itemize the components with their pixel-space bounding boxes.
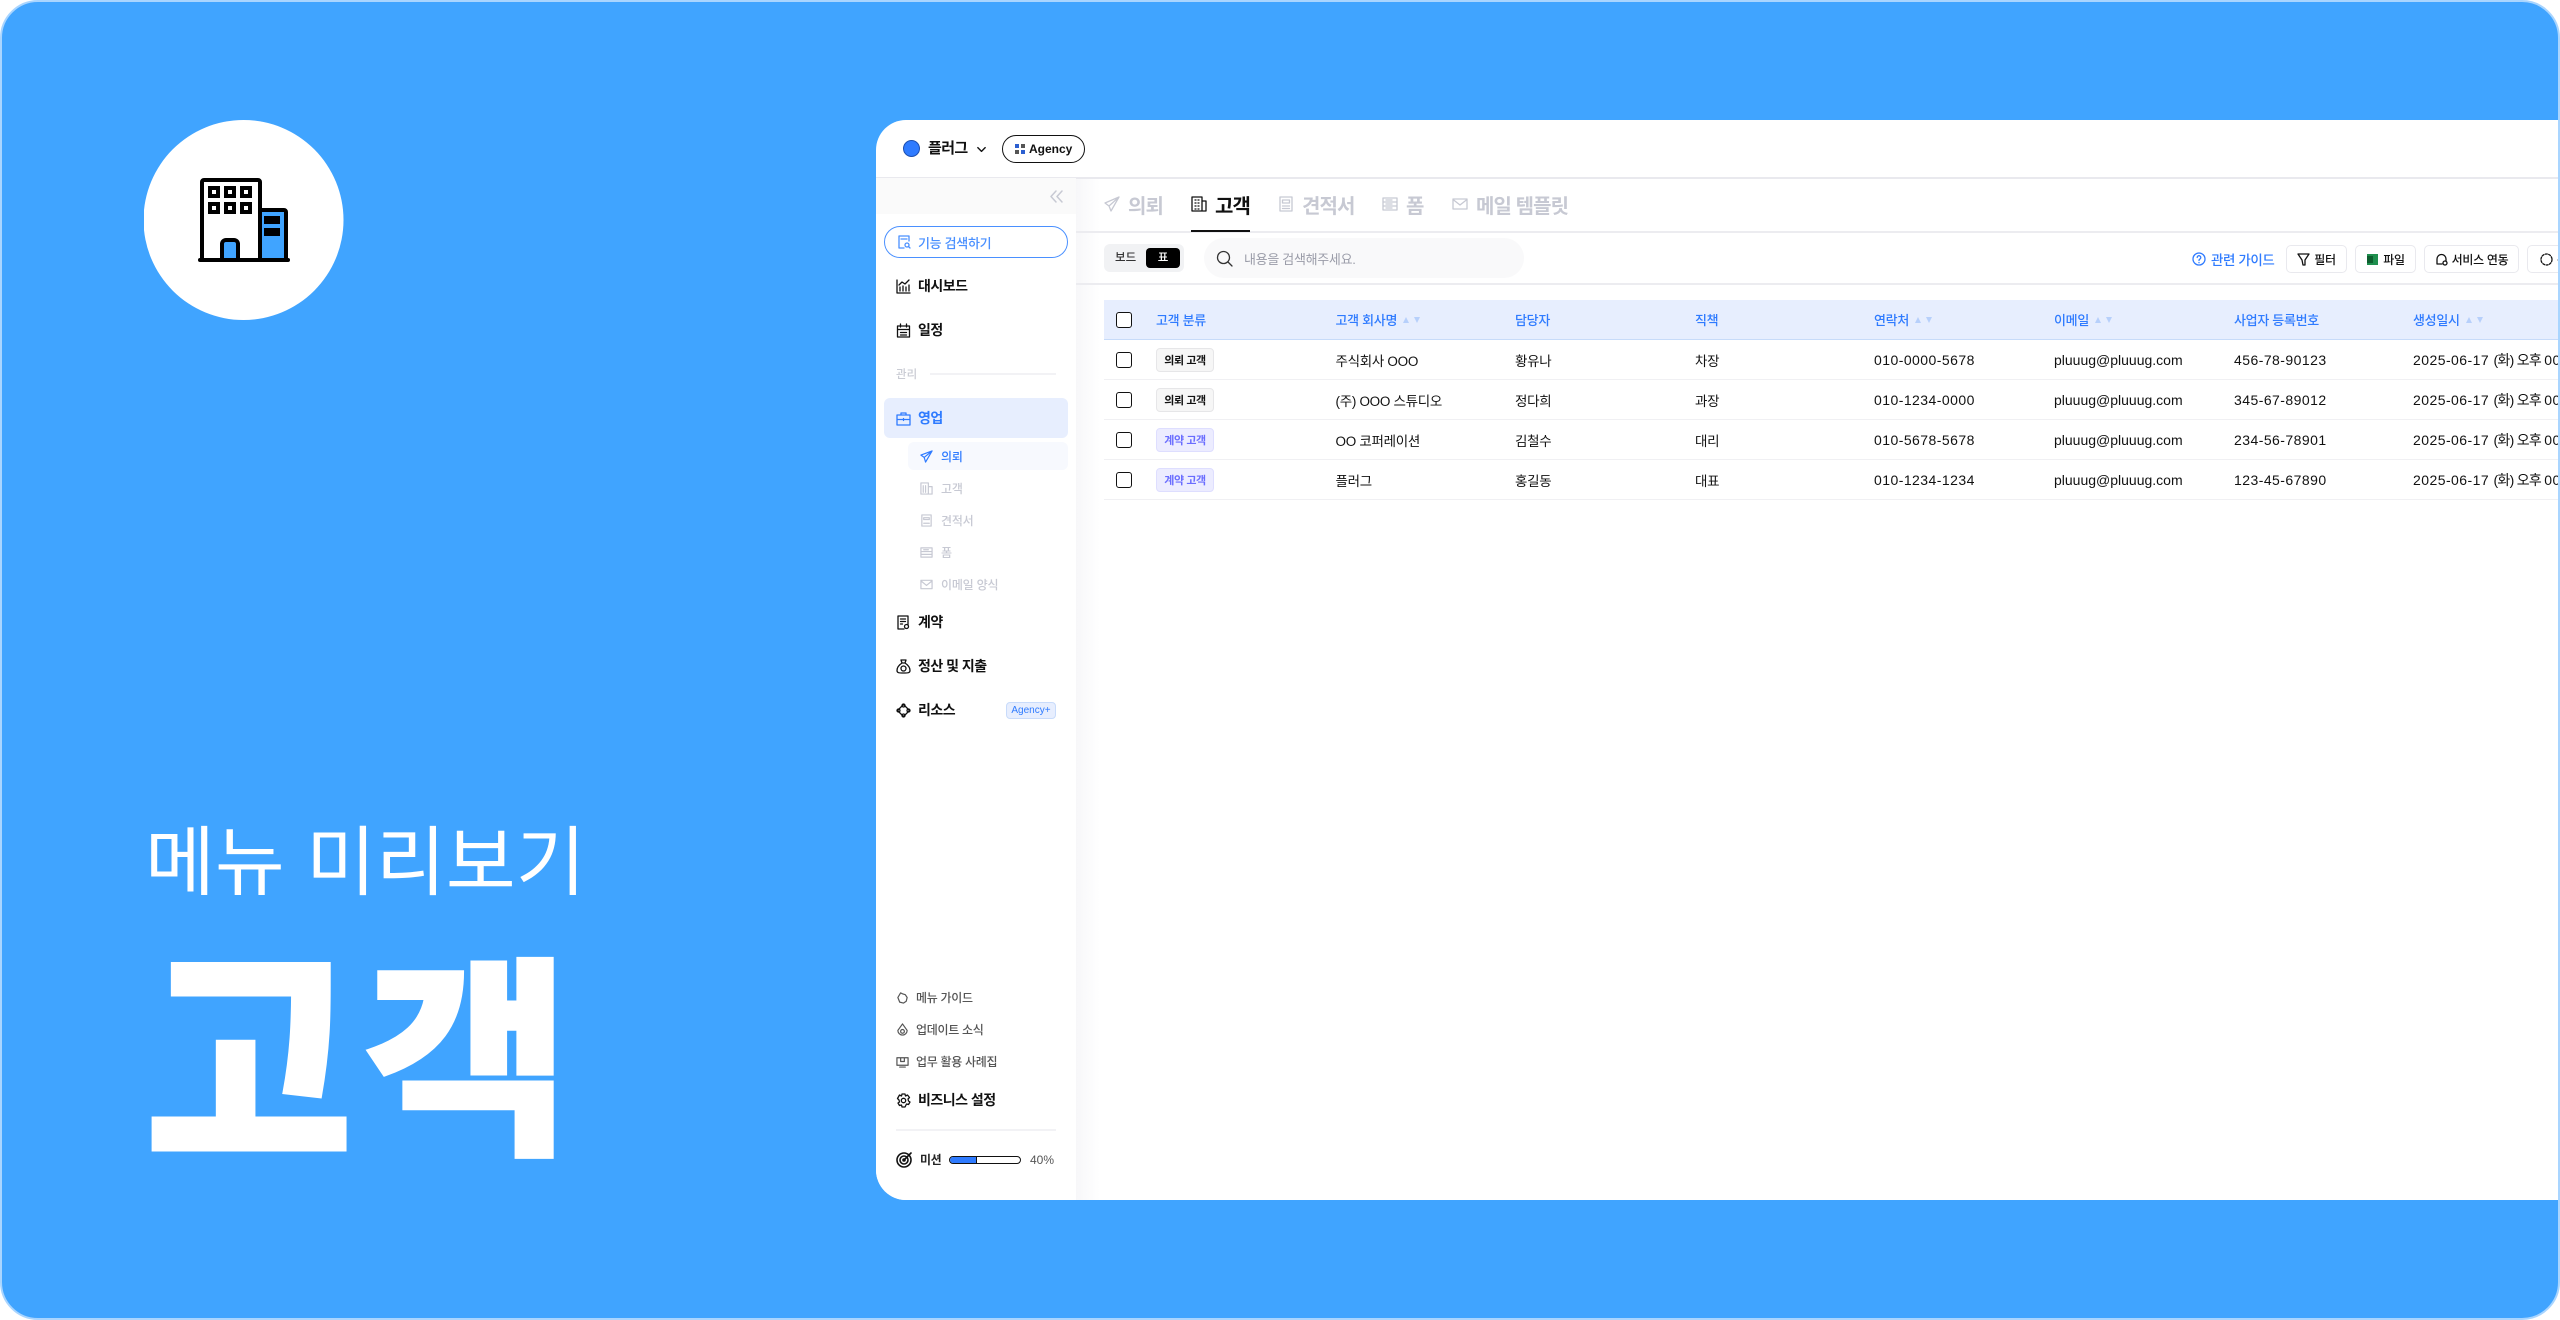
menu: schedule: 일정 [918, 322, 943, 338]
column: created at [2413, 313, 2483, 328]
table row 4: 123-45-67890 [2234, 472, 2327, 488]
table row 4: pluuug@pluuug.com [2054, 472, 2183, 488]
table row 1: 주식회사 OOO [1336, 354, 1418, 368]
toolbar divider [1076, 283, 2560, 285]
panel: app screenshot [876, 120, 2560, 1200]
column: created at: 생성일시 [2413, 313, 2460, 328]
submenu: email format: 이메일 양식 [941, 578, 998, 592]
tab: email template: 메일 템플릿 [1476, 196, 1568, 218]
table row 4: 플러그 [1336, 474, 1372, 488]
link: updates: 업데이트 소식 [916, 1022, 983, 1036]
tab: request [1104, 196, 1163, 218]
menu: resources: 리소스 [918, 702, 955, 718]
menu: resources [896, 702, 956, 718]
title: customer [145, 932, 570, 1204]
table row 4: 010-1234-1234 [1874, 472, 1975, 488]
column: phone: 연락처 [1874, 313, 1909, 328]
table row 1 [1104, 340, 2560, 380]
button: filter [2286, 245, 2347, 273]
toggle: table active [1146, 248, 1180, 268]
main area [1076, 179, 2560, 1200]
agency pill: Agency [1029, 142, 1072, 156]
menu: schedule [896, 322, 943, 338]
table row 2: 의뢰 고객 [1164, 395, 1206, 407]
menu: sales active: 영업 [918, 410, 943, 426]
button: service link [2424, 245, 2519, 273]
workspace name: 플러그 [928, 140, 968, 157]
menu: sales active [884, 398, 1068, 438]
table row 2: (주) OOO 스튜디오 [1336, 394, 1442, 408]
title: customer: 객 [364, 946, 570, 1183]
table row 3: 234-56-78901 [2234, 432, 2327, 448]
table row 1: 의뢰 고객 [1164, 355, 1206, 367]
button: service link: 서비스 연동 [2452, 252, 2508, 266]
agency pill [1002, 135, 1085, 163]
table row 2: 010-1234-0000 [1874, 392, 1975, 408]
button: filter: 필터 [2314, 252, 2336, 266]
feature search pill: 기능 검색하기 [918, 236, 991, 250]
table row 2: (화) 오후 [2493, 392, 2541, 408]
table row 4: 홍길동 [1515, 474, 1551, 488]
badge: agency plus [1006, 702, 1056, 719]
table row 4 [1104, 460, 2560, 500]
button: file: 파일 [2383, 252, 2405, 266]
toggle: board: 보드 [1115, 252, 1136, 264]
submenu: customer: 고객 [941, 482, 963, 496]
column: category: 고객 분류 [1156, 313, 1206, 328]
button: file [2355, 245, 2416, 273]
icon: target [896, 1152, 912, 1168]
table row 2: 정다희 [1515, 394, 1551, 408]
table row 3: 대리 [1695, 434, 1719, 448]
column: company: 고객 회사명 [1336, 313, 1397, 328]
column: email: 이메일 [2054, 313, 2089, 328]
table row 3: OO 코퍼레이션 [1336, 434, 1420, 448]
table row 1: 황유나 [1515, 354, 1551, 368]
title: customer: 고 [145, 932, 353, 1204]
submenu: request [908, 442, 1068, 470]
tab: quote: 견적서 [1302, 196, 1354, 218]
table row 1: pluuug@pluuug.com [2054, 352, 2183, 368]
tab: form [1382, 196, 1424, 218]
tab: quote [1279, 196, 1354, 218]
table row 2: 과장 [1695, 394, 1719, 408]
collapse strip [876, 178, 1076, 214]
table row 1: 차장 [1695, 354, 1719, 368]
column: manager: 담당자 [1515, 313, 1550, 328]
divider [896, 1129, 1056, 1131]
table row 3 [1104, 420, 2560, 460]
tab: request: 의뢰 [1128, 196, 1163, 218]
tab: customer active [1191, 196, 1250, 218]
icon: building badge [144, 120, 344, 320]
percentage: 40% [1030, 1153, 1054, 1167]
tab: form: 폼 [1406, 196, 1424, 218]
menu: settlement: 정산 및 지출 [918, 658, 987, 674]
table header [1104, 300, 2560, 340]
toggle: table active: 표 [1158, 252, 1168, 264]
header checkbox [1116, 312, 1132, 328]
search box: 내용을 검색해주세요. [1244, 252, 1356, 266]
table row 2: pluuug@pluuug.com [2054, 392, 2183, 408]
column: phone [1874, 313, 1932, 328]
tab: customer active: 고객 [1215, 196, 1250, 218]
menu: business settings: 비즈니스 설정 [918, 1092, 996, 1108]
logo dot [903, 140, 920, 157]
table row 4: (화) 오후 [2493, 472, 2541, 488]
table row 1: 010-0000-5678 [1874, 352, 1975, 368]
link: menu guide: 메뉴 가이드 [916, 990, 973, 1004]
link: case studies: 업무 활용 사례집 [916, 1054, 997, 1068]
feature search pill [884, 226, 1068, 258]
table row 2 [1104, 380, 2560, 420]
table row 3: pluuug@pluuug.com [2054, 432, 2183, 448]
menu: contract: 계약 [918, 614, 943, 630]
menu: contract [897, 614, 943, 630]
search box [1204, 238, 1524, 278]
table row 2: 345-67-89012 [2234, 392, 2327, 408]
sidebar [876, 178, 1076, 1200]
view toggle [1104, 244, 1184, 272]
section heading: manage: 관리 [896, 369, 917, 381]
column: email [2054, 313, 2112, 328]
table row 3: 계약 고객 [1164, 435, 1206, 447]
button: more [2527, 245, 2560, 273]
icon: collapse [1050, 190, 1063, 203]
link: related guide: 관련 가이드 [2211, 253, 2274, 268]
progress bar [949, 1156, 1021, 1164]
table row 4: 계약 고객 [1164, 475, 1206, 487]
table row 3: (화) 오후 [2493, 432, 2541, 448]
table row 3: 김철수 [1515, 434, 1551, 448]
sidebar shadow [1076, 179, 1100, 1200]
submenu: quote: 견적서 [941, 514, 974, 528]
submenu: customer [920, 482, 963, 496]
app header [876, 120, 2560, 179]
submenu: form: 폼 [941, 546, 952, 560]
table row 4: 대표 [1695, 474, 1719, 488]
badge: agency plus: Agency+ [1011, 705, 1051, 716]
submenu: form [920, 546, 952, 560]
mission progress [896, 1152, 1054, 1168]
table row 1: (화) 오후 [2493, 352, 2541, 368]
column: position: 직책 [1695, 313, 1718, 328]
submenu: request: 의뢰 [941, 450, 963, 464]
submenu: quote [921, 514, 974, 528]
tabs divider [1076, 231, 2560, 233]
menu: dashboard: 대시보드 [918, 278, 968, 294]
mission label: 미션 [920, 1153, 941, 1167]
icon: chevron [977, 146, 986, 152]
table row 3: 010-5678-5678 [1874, 432, 1975, 448]
menu: dashboard [896, 278, 968, 294]
table row 1: 456-78-90123 [2234, 352, 2327, 368]
tab underline [1191, 230, 1250, 232]
subtitle: menu preview: 메뉴 미리보기 [145, 821, 586, 906]
column: business number: 사업자 등록번호 [2234, 313, 2319, 328]
